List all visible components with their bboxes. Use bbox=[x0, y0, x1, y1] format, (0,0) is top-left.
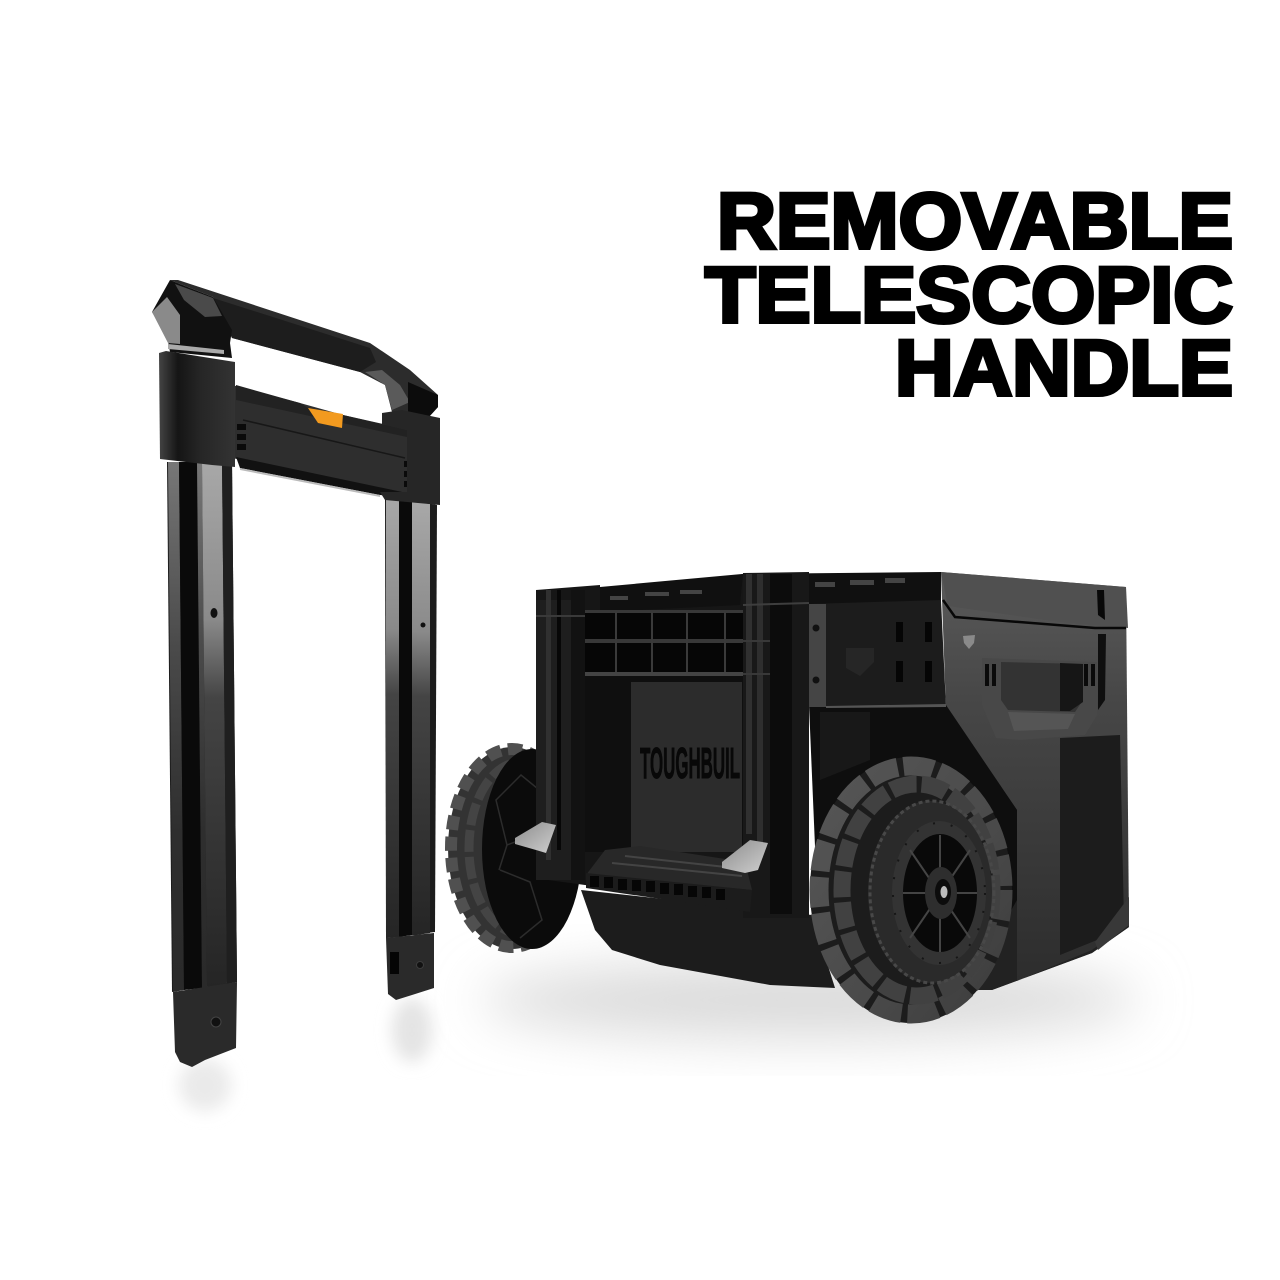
left wheel bbox=[448, 747, 582, 949]
rim bbox=[892, 821, 986, 965]
side carry handle bbox=[982, 658, 1097, 740]
left latch bbox=[515, 822, 556, 853]
telescopic handle bbox=[152, 280, 440, 1067]
left post bbox=[536, 590, 585, 880]
crossbar vents bbox=[237, 424, 412, 487]
title: TELESCOPIC bbox=[705, 250, 1233, 339]
crate front bbox=[515, 572, 809, 918]
recess panel bbox=[585, 676, 743, 852]
left collar bbox=[159, 351, 235, 467]
tool box on wheels bbox=[448, 572, 1129, 1023]
right pole bbox=[385, 495, 437, 1000]
right latch bbox=[722, 840, 768, 873]
left pole foot bbox=[173, 982, 237, 1067]
floor shadow bbox=[179, 962, 1140, 1111]
side panel bbox=[941, 572, 1129, 990]
right wheel bbox=[810, 757, 1012, 1023]
crate front: TOUGHBUIL bbox=[640, 739, 740, 788]
lower body bbox=[581, 890, 835, 988]
right collar bbox=[380, 410, 440, 505]
grip bbox=[170, 280, 438, 418]
black recess below bracket bbox=[809, 705, 1017, 1000]
right pole foot bbox=[386, 933, 434, 1000]
title bbox=[705, 176, 1233, 412]
side bracket bbox=[809, 600, 946, 708]
title: REMOVABLE bbox=[717, 176, 1233, 265]
logo mark bbox=[963, 635, 975, 649]
top rim bbox=[600, 572, 941, 612]
wheel inner disc bbox=[482, 749, 582, 949]
crate grid bbox=[585, 610, 743, 676]
orange release button bbox=[308, 408, 343, 428]
crossbar bbox=[232, 385, 412, 497]
right post bbox=[743, 573, 809, 918]
title: HANDLE bbox=[895, 323, 1233, 412]
left head bbox=[152, 280, 232, 358]
left pole bbox=[167, 462, 237, 1067]
step tray bbox=[586, 846, 752, 912]
